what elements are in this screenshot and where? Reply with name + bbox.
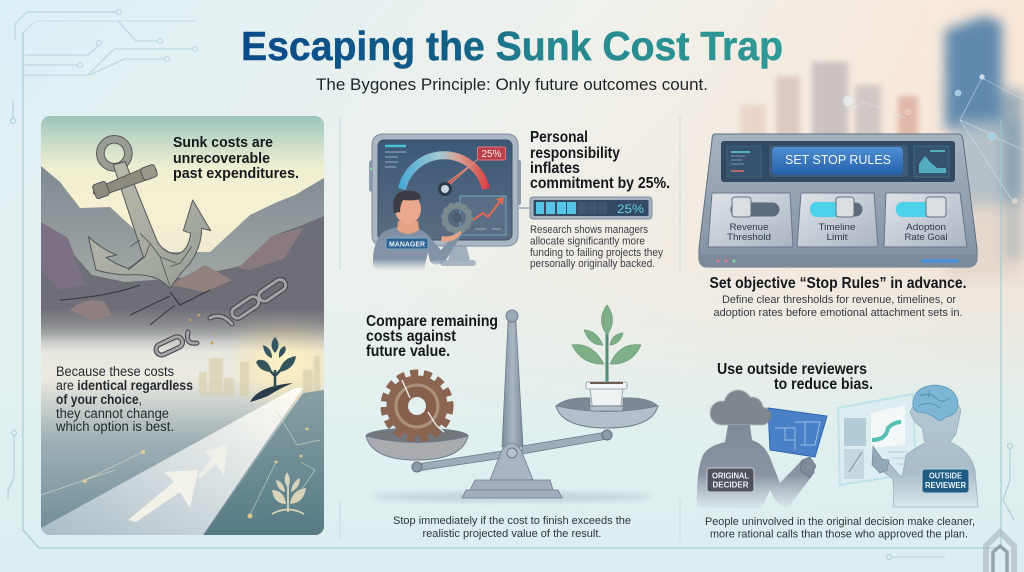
label: outside reviewer — [922, 469, 969, 493]
text: why sunk costs do not matter: are identical regardless — [56, 378, 193, 393]
switch: revenue threshold — [708, 193, 793, 247]
network nodes decoration — [843, 74, 1024, 204]
caption: stop immediately: realistic projected value of the result. — [422, 528, 602, 540]
title: Escaping the Sunk Cost Trap — [241, 23, 783, 69]
label: original decider: DECIDER — [712, 480, 748, 490]
label: manager: MANAGER — [389, 240, 426, 248]
subtitle: The Bygones Principle: Only future outcomes count. — [316, 76, 708, 94]
label: original decider — [707, 468, 754, 492]
review screen — [838, 394, 916, 485]
label: original decider: ORIGINAL — [712, 470, 749, 480]
mini chart — [460, 196, 506, 235]
switch: adoption rate goal — [884, 193, 967, 247]
heading: stop rules: Set objective “Stop Rules” in advance. — [710, 275, 966, 292]
text: sunk costs definition — [173, 134, 299, 182]
blurred city skyline background — [740, 16, 1024, 280]
illustration: monitor with gauge — [369, 134, 521, 270]
heading: outside reviewers: Use outside reviewers — [717, 361, 867, 378]
skyline — [199, 356, 320, 396]
left pan back — [366, 428, 468, 444]
text: sunk costs definition: past expenditures. — [173, 165, 299, 182]
illustration: control panel — [699, 134, 977, 267]
icon: potted plant — [572, 305, 641, 413]
arrows on road — [128, 445, 227, 522]
icon: pointing hand — [872, 446, 889, 473]
heading: outside reviewers: to reduce bias. — [774, 376, 873, 393]
logo mark — [986, 532, 1014, 572]
text: define thresholds: Define clear thresholds for revenue, timelines, or — [722, 294, 956, 306]
progress bar: 25% — [518, 197, 652, 219]
text: research note — [530, 224, 663, 270]
heading: compare: future value. — [366, 343, 450, 360]
illustration: outside reviewer — [838, 385, 978, 507]
button: set stop rules: SET STOP RULES — [785, 152, 891, 167]
illustration: balance scale — [366, 305, 658, 502]
text: why sunk costs do not matter: of your choice, — [56, 392, 142, 407]
text: people uninvolved: People uninvolved in the original decision make cleaner, — [705, 516, 975, 528]
panel: stop rules — [699, 134, 977, 319]
text: sunk costs definition: Sunk costs are — [173, 134, 273, 151]
panel: sunk costs illustration — [41, 116, 343, 535]
text: research note: allocate significantly more — [530, 236, 645, 248]
panel: outside reviewers — [697, 361, 978, 540]
caption: stop immediately — [393, 515, 631, 540]
icon: gear — [442, 204, 472, 232]
heading: compare: Compare remaining — [366, 313, 498, 330]
heading: compare — [366, 313, 498, 360]
icon: broken chain — [154, 277, 288, 357]
text: research note: personally originally backed. — [530, 258, 655, 270]
text: people uninvolved: more rational calls than those who approved the plan. — [710, 528, 968, 540]
panel: compare remaining costs — [366, 305, 658, 540]
switch: timeline limit: Limit — [826, 232, 848, 243]
icon: cloud — [710, 390, 771, 425]
switch: revenue threshold: Threshold — [727, 232, 771, 243]
scale beam — [417, 432, 607, 471]
heading: compare: costs against — [366, 328, 456, 345]
caption: stop immediately: Stop immediately if the cost to finish exceeds the — [393, 515, 631, 527]
scale fulcrum — [490, 443, 533, 480]
switch: timeline limit — [797, 193, 878, 247]
label: outside reviewer: OUTSIDE — [929, 470, 962, 480]
text: sunk costs definition: unrecoverable — [173, 150, 270, 167]
circuit traces and lights — [41, 410, 320, 518]
person: manager — [373, 191, 462, 270]
heading: personal responsibility: inflates — [530, 160, 580, 177]
text: people uninvolved — [705, 516, 975, 540]
button: set stop rules — [772, 147, 903, 175]
heading: personal responsibility: Personal — [530, 129, 588, 146]
switch: timeline limit: Timeline — [818, 222, 856, 233]
text: define thresholds: adoption rates before emotional attachment sets in. — [714, 307, 962, 319]
heading: personal responsibility — [530, 129, 670, 192]
text: why sunk costs do not matter: Because these costs — [56, 364, 174, 379]
gauge — [402, 147, 506, 196]
far mountains — [41, 166, 324, 345]
heading: personal responsibility: responsibility — [530, 145, 620, 162]
sun glow — [236, 320, 324, 408]
switch: adoption rate goal: Rate Goal — [904, 232, 948, 243]
near rocks — [41, 216, 324, 352]
road — [41, 388, 324, 535]
text: define thresholds — [714, 294, 962, 319]
blueprint — [768, 408, 827, 457]
text: why sunk costs do not matter: they cannot change — [56, 406, 169, 421]
illustration: original decider — [697, 390, 827, 508]
progress bar: 25%: 25% — [617, 202, 644, 216]
heading: personal responsibility: commitment by 25%. — [530, 175, 670, 192]
icon: pale plant — [272, 472, 306, 514]
gauge: 25% — [481, 149, 502, 160]
panel: personal responsibility — [369, 129, 670, 270]
text: research note: funding to failing projects they — [530, 247, 663, 259]
heading: outside reviewers — [717, 361, 873, 393]
switch: revenue threshold: Revenue — [730, 222, 768, 233]
icon: anchor — [88, 139, 211, 288]
left pan front — [366, 436, 468, 460]
text: research note: Research shows managers — [530, 224, 648, 236]
right pan — [556, 398, 658, 428]
icon: rusty gear — [384, 373, 450, 439]
icon: seedling on hill — [250, 337, 296, 402]
text: why sunk costs do not matter: which option is best. — [55, 419, 174, 434]
lower fog and ground — [41, 325, 324, 535]
circuit lines top-left — [15, 10, 198, 75]
switch: adoption rate goal: Adoption — [906, 222, 946, 233]
text: why sunk costs do not matter — [55, 364, 193, 434]
label: outside reviewer: REVIEWER — [925, 480, 966, 490]
scale post — [502, 322, 523, 447]
icon: brain — [913, 385, 958, 421]
